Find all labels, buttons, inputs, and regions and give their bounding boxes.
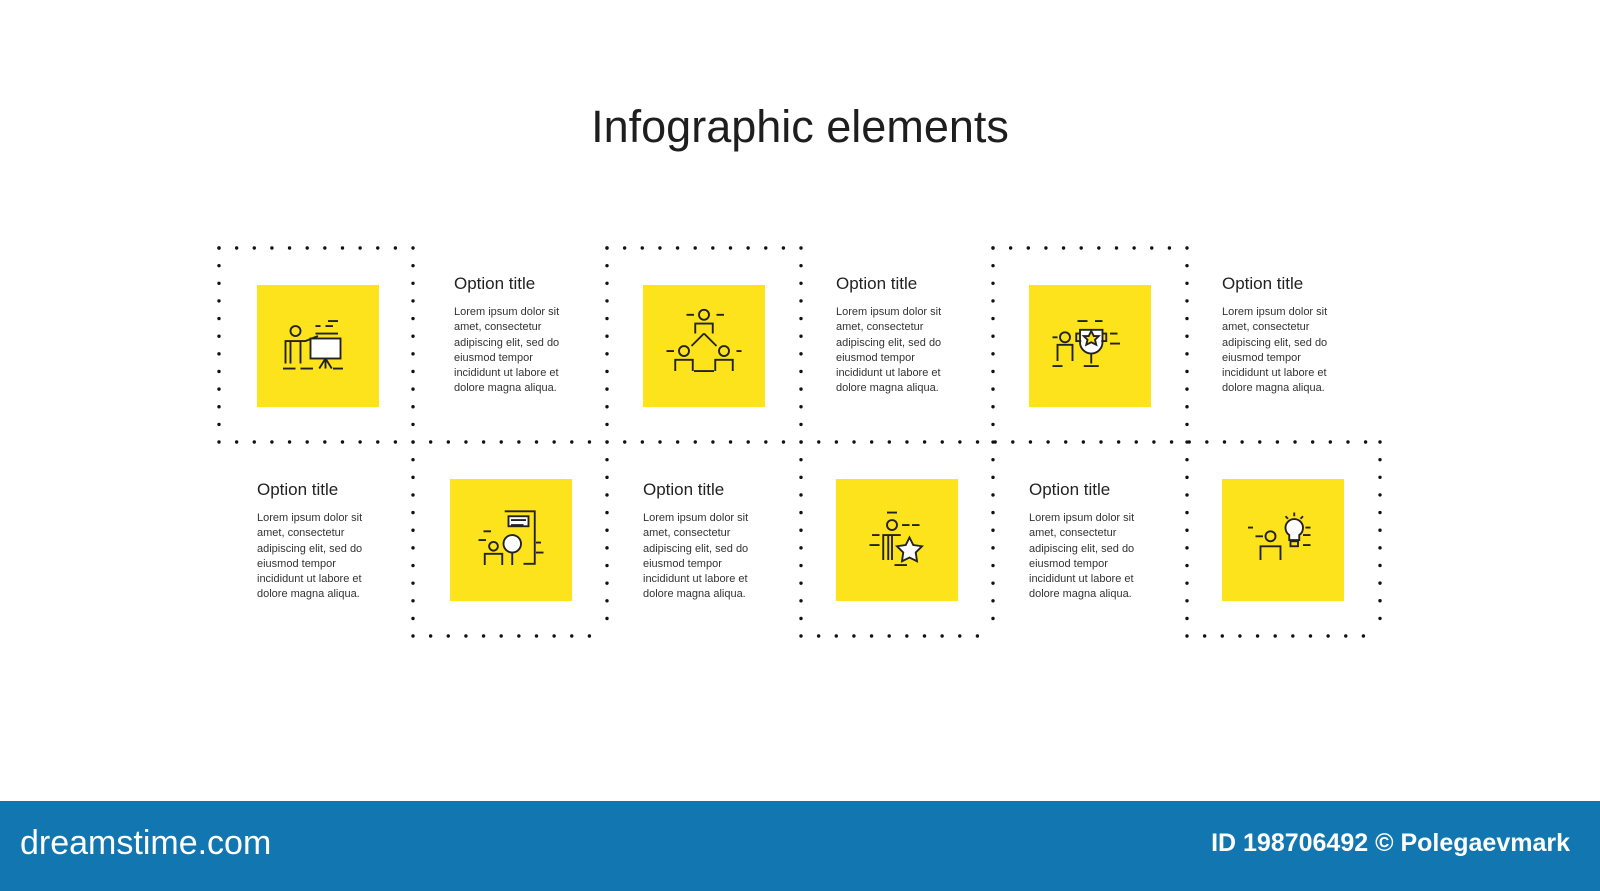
text 3: Lorem ipsum dolor sit amet, consectetur adipiscing elit, sed do eiusmod tempor incididunt ut labore et dolore magna aliqua. bbox=[1222, 306, 1327, 394]
panel 2: team bbox=[643, 285, 765, 407]
text 6: Option title bbox=[1029, 480, 1110, 499]
footer bar bbox=[0, 801, 1600, 891]
footer logo: dreamstime.com bbox=[20, 824, 271, 862]
panel 5: star person bbox=[836, 479, 958, 601]
footer id: ID 198706492 © Polegaevmark bbox=[1211, 829, 1570, 857]
panel 3: trophy bbox=[1029, 285, 1151, 407]
text 3: Option title bbox=[1222, 274, 1303, 293]
text 2: Lorem ipsum dolor sit amet, consectetur adipiscing elit, sed do eiusmod tempor incididunt ut labore et dolore magna aliqua. bbox=[836, 306, 941, 394]
text 1: Lorem ipsum dolor sit amet, consectetur adipiscing elit, sed do eiusmod tempor incididunt ut labore et dolore magna aliqua. bbox=[454, 306, 559, 394]
panel 6: idea bbox=[1222, 479, 1344, 601]
text 6: Lorem ipsum dolor sit amet, consectetur adipiscing elit, sed do eiusmod tempor incididunt ut labore et dolore magna aliqua. bbox=[1029, 512, 1134, 600]
panel 4: search document bbox=[450, 479, 572, 601]
title: Infographic elements bbox=[591, 101, 1009, 152]
text 4: Option title bbox=[257, 480, 338, 499]
text 1: Option title bbox=[454, 274, 535, 293]
text 4: Lorem ipsum dolor sit amet, consectetur adipiscing elit, sed do eiusmod tempor incididunt ut labore et dolore magna aliqua. bbox=[257, 512, 362, 600]
text 5: Option title bbox=[643, 480, 724, 499]
text 5: Lorem ipsum dolor sit amet, consectetur adipiscing elit, sed do eiusmod tempor incididunt ut labore et dolore magna aliqua. bbox=[643, 512, 748, 600]
text 2: Option title bbox=[836, 274, 917, 293]
panel 1: presentation bbox=[257, 285, 379, 407]
